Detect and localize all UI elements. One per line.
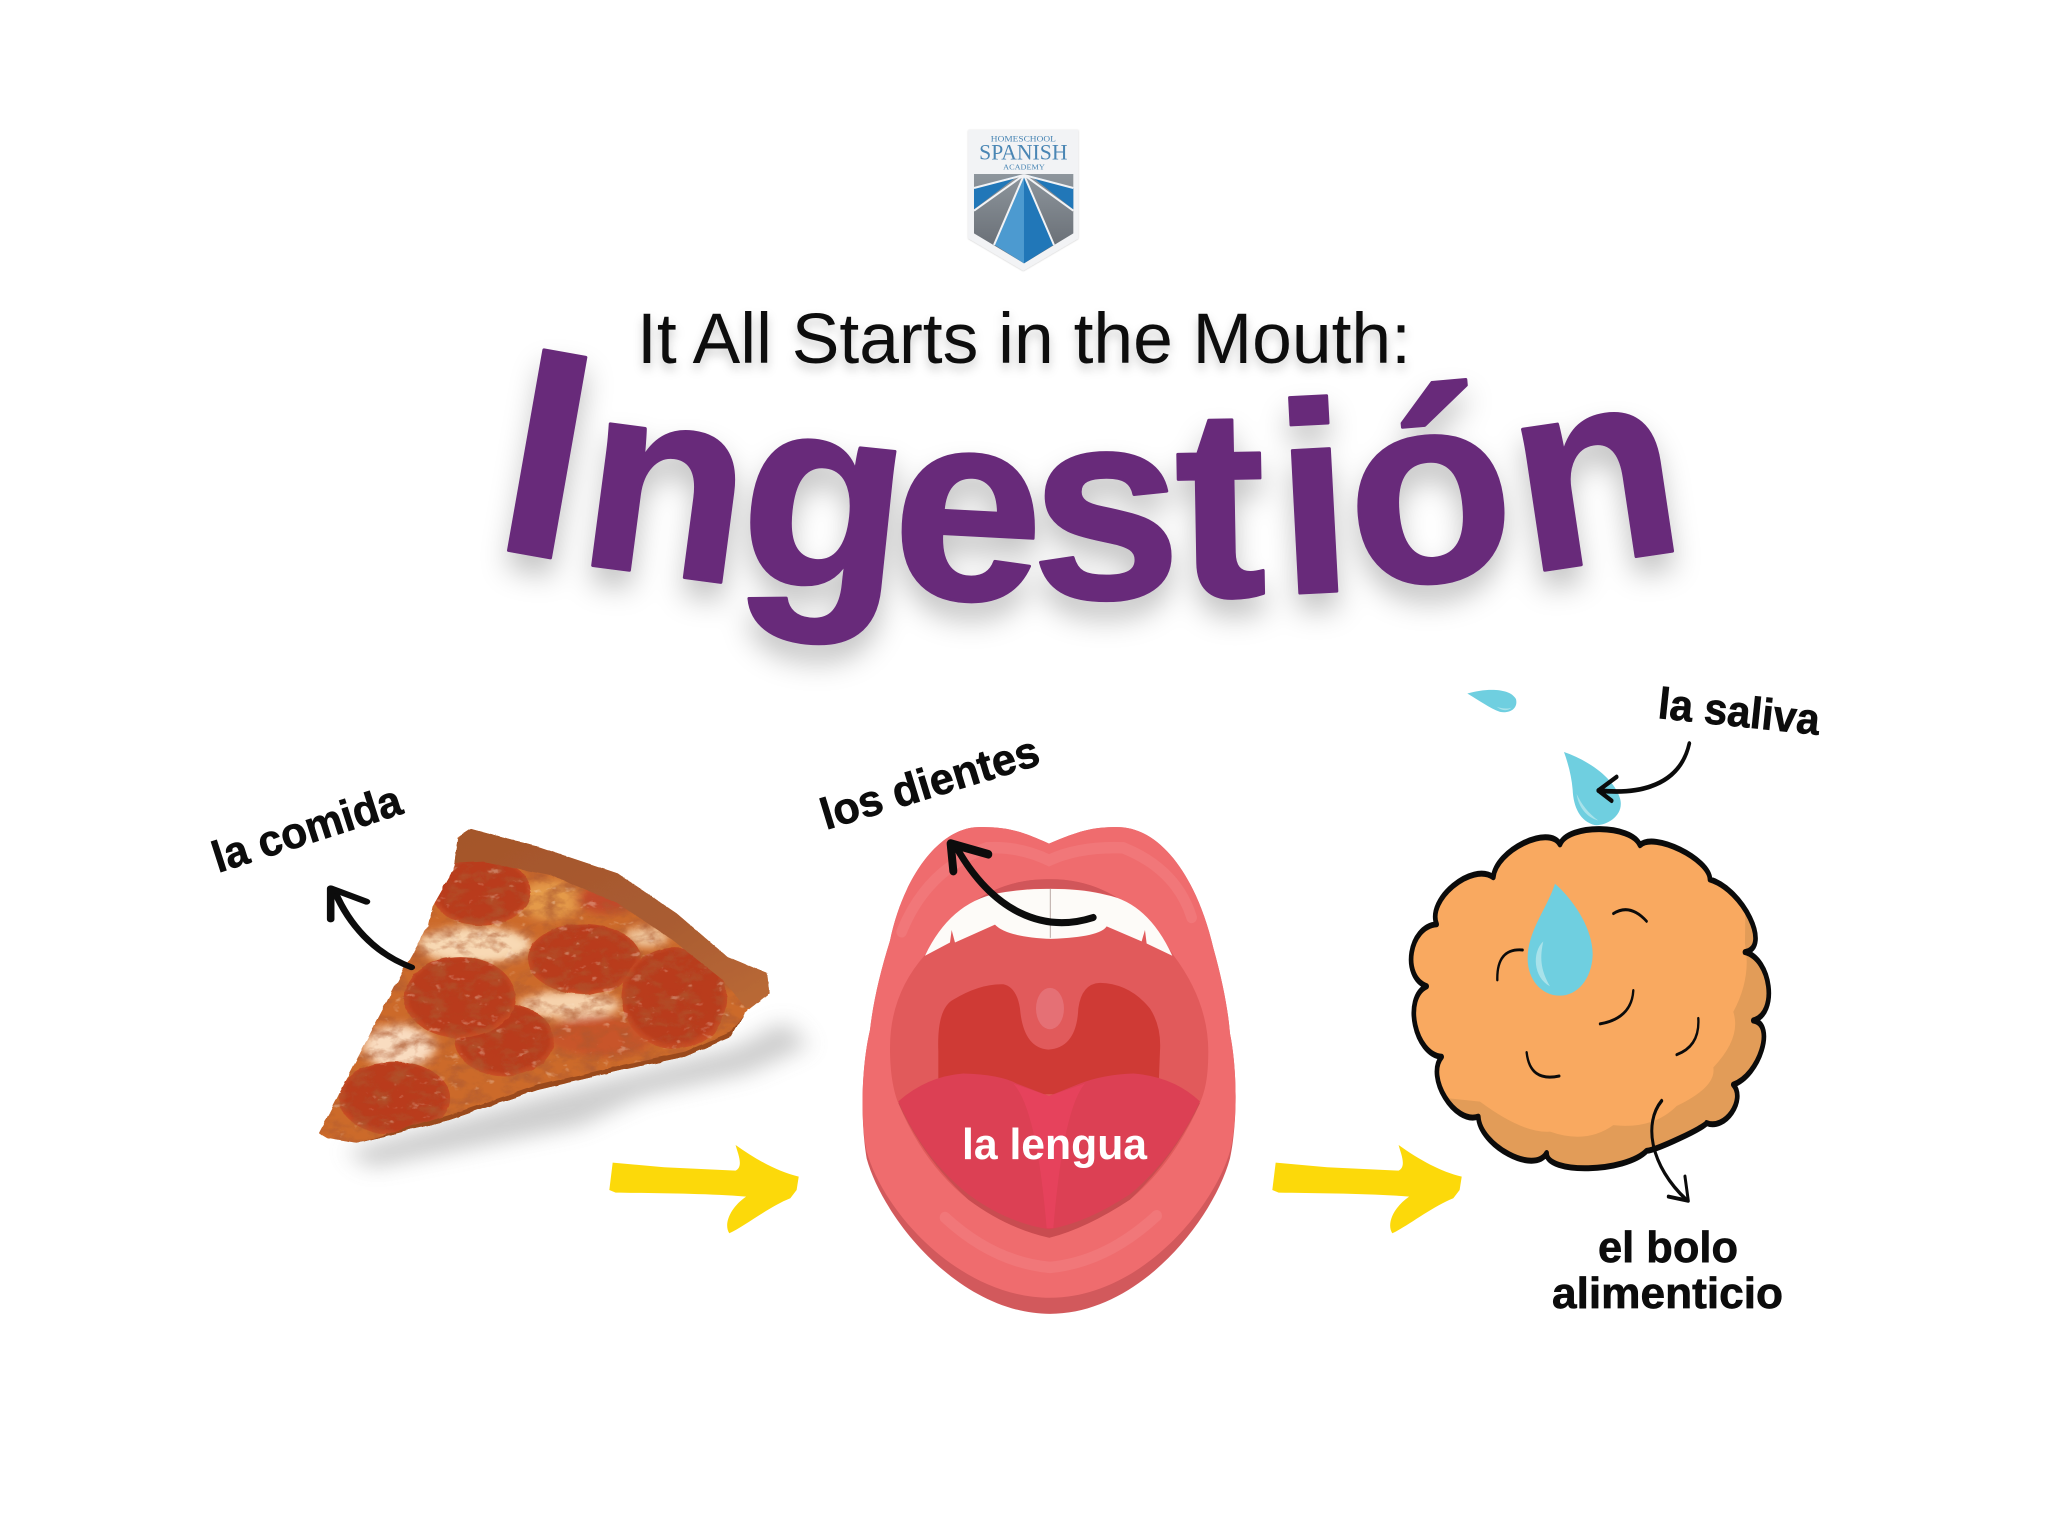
label: el bolo alimenticio bbox=[1552, 1223, 1783, 1318]
flying saliva drop bbox=[1467, 690, 1516, 712]
pizza shadow bbox=[348, 1020, 807, 1168]
label: la saliva: la saliva bbox=[1656, 679, 1823, 745]
mouth cavity bbox=[890, 879, 1208, 1238]
shield background bbox=[968, 130, 1078, 271]
label: el bolo alimenticio: el bolo bbox=[1598, 1223, 1738, 1272]
tongue shadow bbox=[898, 1103, 1200, 1238]
arrow: yellow, pizza to mouth bbox=[609, 1145, 799, 1233]
lip highlights bbox=[902, 848, 1192, 1267]
baked texture bbox=[319, 829, 769, 1143]
label: el bolo alimenticio: alimenticio bbox=[1552, 1269, 1783, 1318]
tongue bbox=[898, 1074, 1200, 1229]
logo wordmark: SPANISH bbox=[979, 140, 1068, 165]
illustration: pizza slice bbox=[306, 820, 807, 1168]
lips bbox=[863, 827, 1236, 1298]
logo rays emblem bbox=[974, 174, 1073, 263]
arrow: teeth pointer bbox=[951, 844, 1093, 923]
title: Ingestión: I bbox=[478, 283, 617, 623]
arrow: saliva pointer bbox=[1598, 744, 1689, 801]
illustration: food bolus bbox=[1400, 690, 1769, 1168]
logo wordmark bbox=[979, 135, 1068, 171]
arrow: bolus pointer bbox=[1652, 1101, 1688, 1201]
label: los dientes: los dientes bbox=[815, 727, 1045, 840]
throat bbox=[938, 983, 1160, 1094]
label: la lengua: la lengua bbox=[962, 1120, 1148, 1169]
label: la comida: la comida bbox=[206, 776, 408, 883]
cheese and sauce patches bbox=[363, 880, 668, 1068]
cheese glints bbox=[332, 854, 766, 1138]
bolus creases bbox=[1497, 910, 1698, 1077]
pizza slice body bbox=[306, 820, 778, 1153]
bolus body shade bbox=[1411, 829, 1769, 1168]
title: Ingestión: ngestión bbox=[566, 308, 1698, 661]
arrow: food pointer bbox=[331, 888, 411, 967]
bolus body bbox=[1414, 832, 1747, 1137]
logo: Homeschool Spanish Academy shield bbox=[968, 130, 1078, 271]
illustration: open mouth bbox=[863, 827, 1236, 1314]
outer lip shade bbox=[863, 827, 1236, 1314]
saliva drop above bolus bbox=[1564, 752, 1621, 825]
teeth bbox=[925, 889, 1172, 956]
pepperoni slices bbox=[339, 858, 727, 1135]
pizza base bbox=[306, 820, 778, 1153]
uvula bbox=[1036, 988, 1064, 1029]
baked lower edge bbox=[357, 1013, 744, 1147]
logo wordmark: HOMESCHOOL bbox=[991, 135, 1056, 144]
logo wordmark: ACADEMY bbox=[1003, 162, 1045, 171]
arrow: yellow, mouth to bolus bbox=[1272, 1145, 1462, 1233]
saliva drop on bolus bbox=[1528, 884, 1593, 996]
tongue centre bbox=[1013, 1084, 1085, 1228]
band above teeth bbox=[925, 879, 1173, 955]
bolus outline bbox=[1411, 829, 1769, 1168]
subtitle: It All Starts in the Mouth: bbox=[637, 300, 1411, 379]
crust bbox=[449, 828, 773, 1008]
